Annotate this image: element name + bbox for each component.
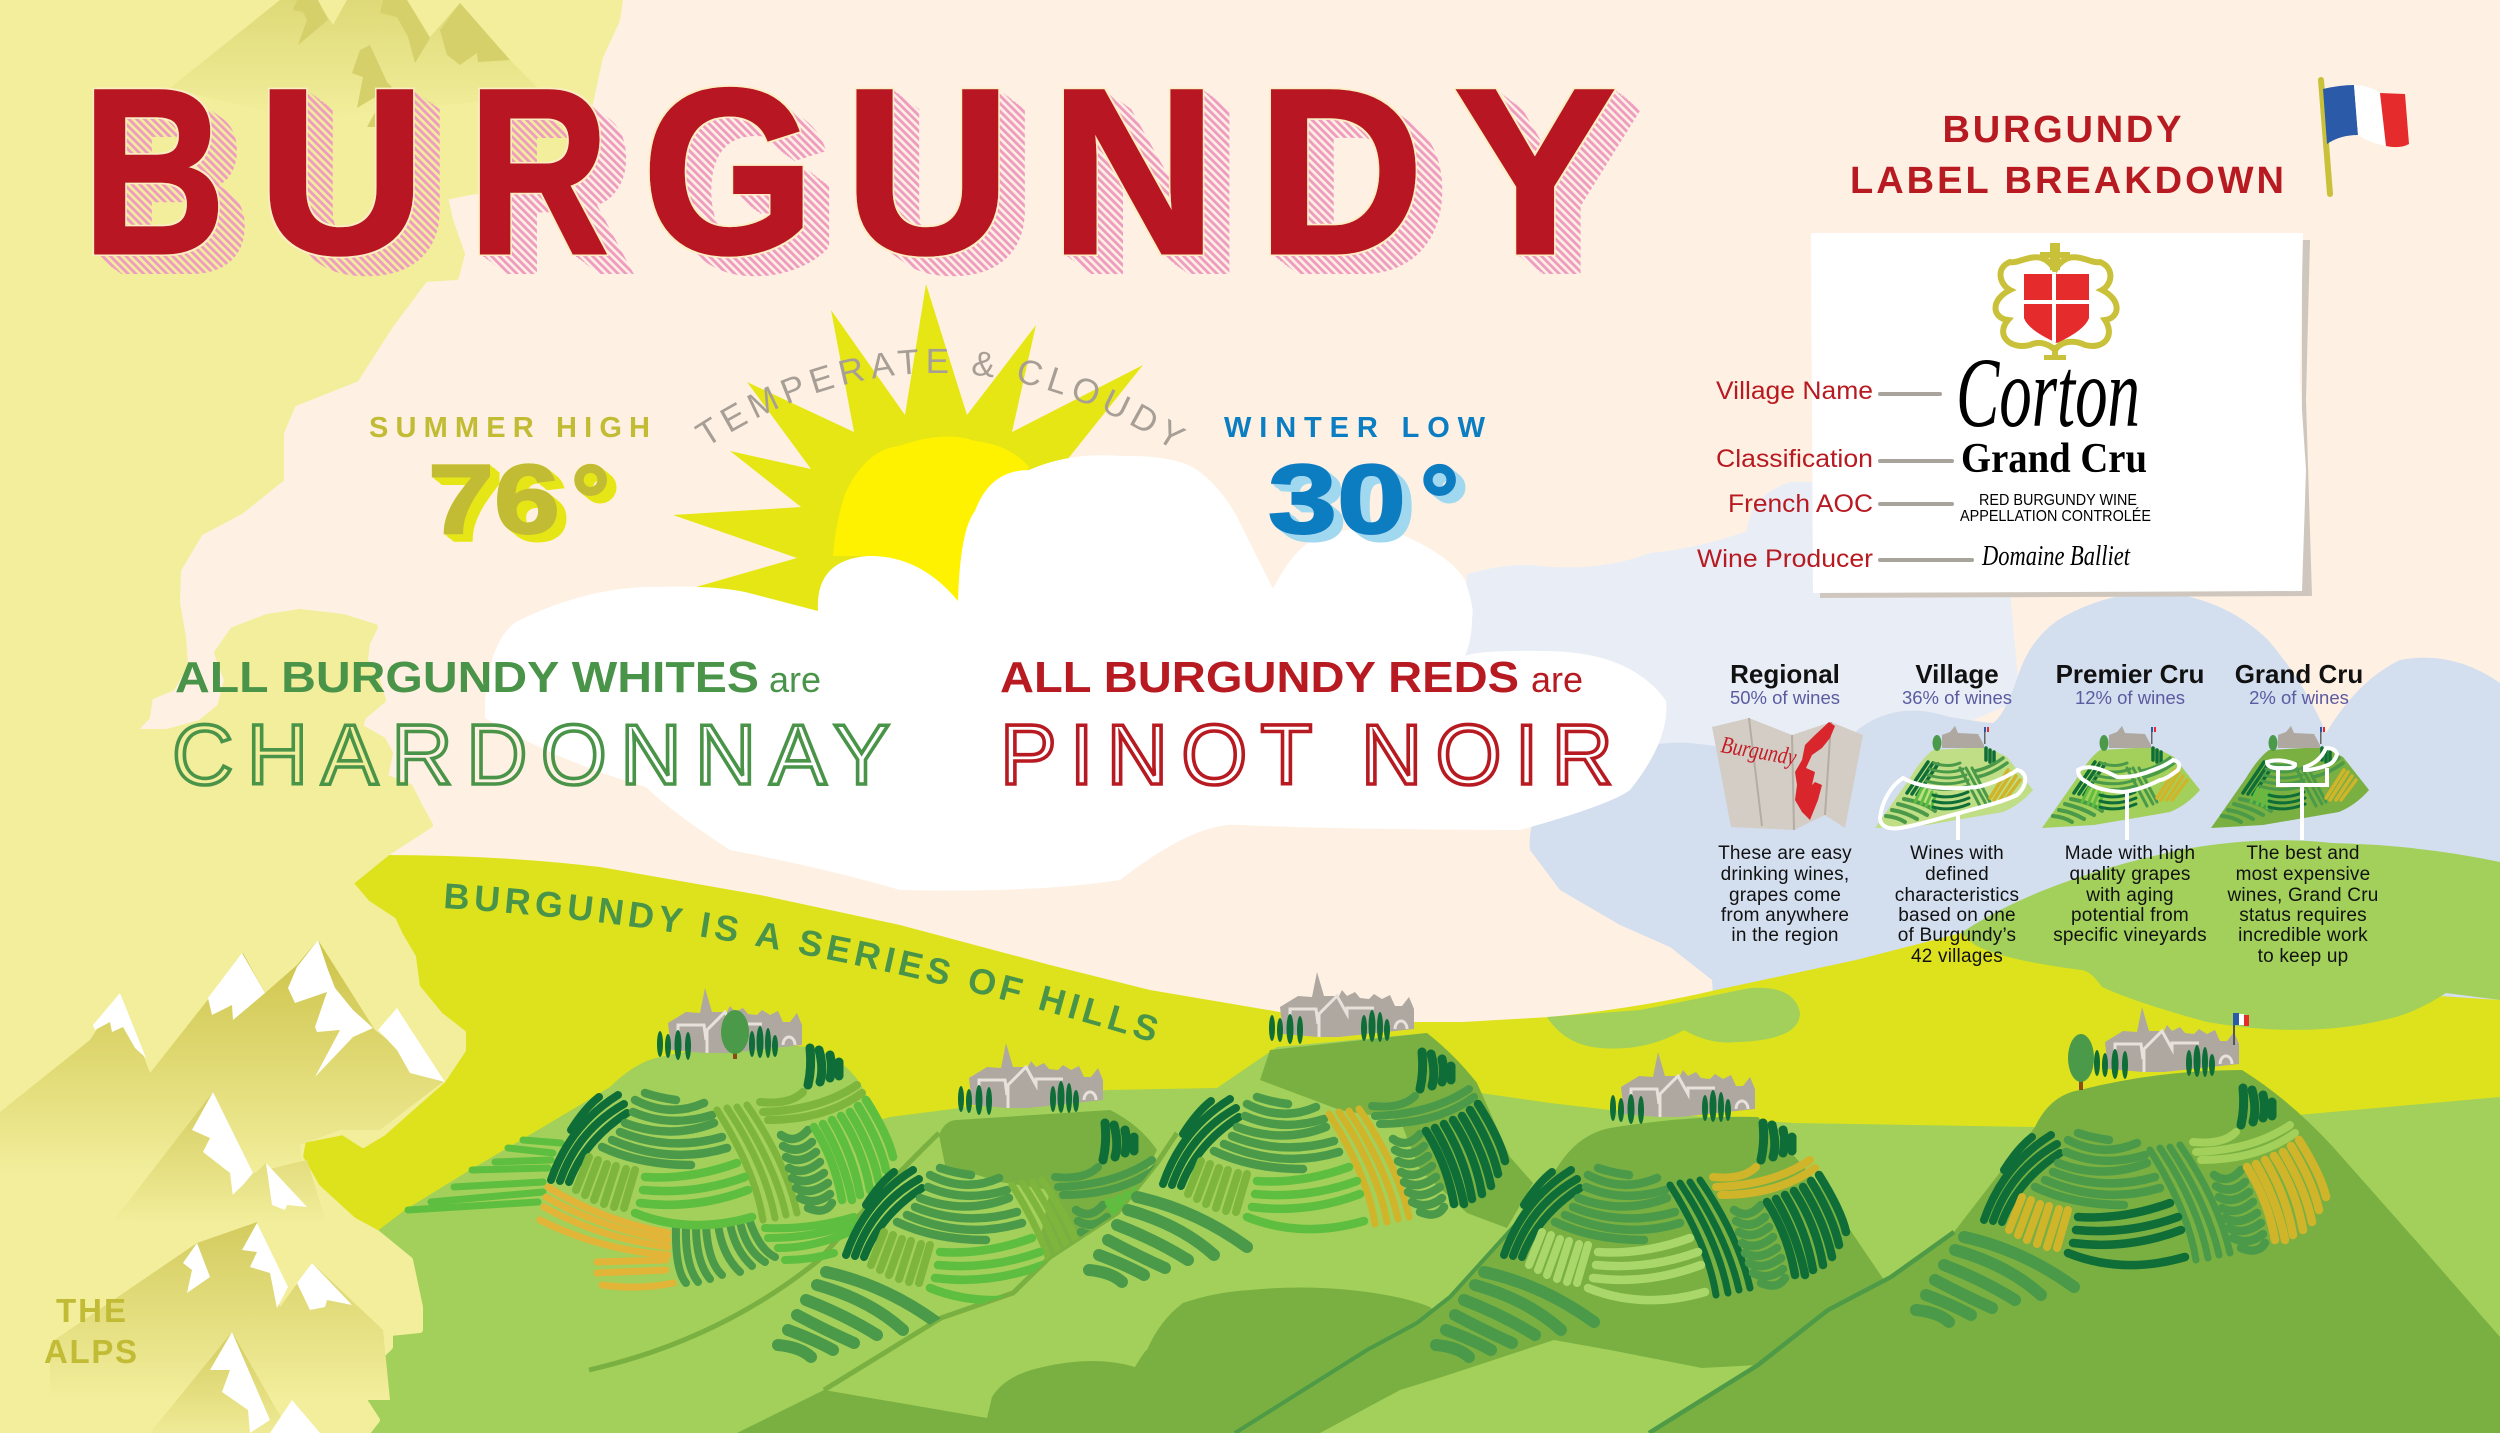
title: BURGUNDY	[92, 85, 1642, 276]
the alps label	[44, 1292, 137, 1370]
hill 5 tree	[2068, 1034, 2094, 1090]
label breakdown heading	[1850, 109, 2284, 202]
tier: regional	[1712, 659, 1863, 946]
appellation: APPELLATION CONTROLÉE	[1960, 506, 2151, 525]
darker blue clouds	[1530, 592, 2500, 1100]
winter low value	[1268, 444, 1459, 554]
top alps mountains	[170, 0, 545, 127]
summer high label: SUMMER HIGH	[369, 412, 650, 444]
red grape heading: are	[1531, 659, 1583, 700]
grand cru: Grand Cru	[1961, 436, 2147, 482]
tier: village: 42 villages	[1911, 946, 2003, 967]
tier: village: Village	[1915, 659, 1999, 689]
tier: grand cru: incredible work	[2238, 925, 2368, 946]
wine label card	[1811, 233, 2312, 598]
bottom peaks	[150, 1332, 290, 1433]
red grape heading: ALL BURGUNDY REDS	[1000, 653, 1519, 702]
white grape heading: ALL BURGUNDY WHITES	[175, 653, 759, 702]
hill 5 flag	[2233, 1013, 2249, 1045]
hill 2 vineyards	[778, 1043, 1188, 1357]
hill 4 body	[1235, 1117, 1891, 1433]
appellation: RED BURGUNDY WINE	[1979, 492, 2137, 509]
tier: regional: drinking wines,	[1721, 864, 1849, 885]
summer high value	[428, 444, 610, 554]
label callouts: French AOC	[1728, 490, 1873, 518]
winter low value: 30	[1268, 444, 1406, 554]
tier: village: Wines with	[1910, 843, 2004, 864]
tier: regional: from anywhere	[1721, 905, 1849, 926]
icon: map	[1712, 718, 1863, 830]
sun rays	[673, 284, 1143, 611]
light green blob right	[1961, 840, 2500, 1030]
hill 1 ochre patch	[540, 1187, 673, 1287]
title letters: N	[1050, 40, 1217, 304]
tier: village	[1875, 659, 2033, 967]
temperate and cloudy arc text: TEMPERATE & CLOUDY	[694, 348, 1186, 446]
tier: grand cru: to keep up	[2258, 946, 2348, 967]
tier: grand cru: The best and	[2246, 843, 2360, 864]
alps mountains	[0, 940, 445, 1433]
second peak	[114, 1092, 327, 1225]
hill 1 tree	[721, 1010, 749, 1059]
plain and hill 1	[300, 1033, 2500, 1433]
tier: grand cru: Grand Cru	[2235, 659, 2363, 689]
tier: village: of Burgundy’s	[1898, 925, 2016, 946]
icon: french flag	[2321, 80, 2409, 194]
winter low label: WINTER LOW	[1224, 412, 1486, 444]
label breakdown heading: BURGUNDY	[1942, 109, 2182, 151]
tier: premier cru: with aging	[2085, 885, 2174, 906]
icon: crest	[1996, 243, 2117, 360]
tier: regional: in the region	[1731, 925, 1839, 946]
hill 3 vineyards	[1089, 972, 1505, 1282]
chardonnay: CHARDONNAY	[172, 708, 890, 803]
series of hills curved text: BURGUNDY IS A SERIES OF HILLS	[445, 884, 1158, 1040]
tier: village: 36% of wines	[1902, 687, 2012, 708]
title letters: G	[642, 40, 815, 304]
corton: Corton	[1956, 337, 2140, 448]
tier: premier cru: quality grapes	[2069, 864, 2191, 885]
main ridge	[0, 940, 443, 1190]
tier: grand cru: most expensive	[2236, 864, 2370, 885]
title letters: B	[82, 40, 226, 304]
ridge lines	[589, 1133, 1177, 1390]
tier: premier cru	[2042, 659, 2207, 946]
title letters	[82, 40, 1616, 304]
cloud front over sun	[660, 455, 1273, 700]
the alps label: THE	[56, 1292, 126, 1329]
title letters: Y	[1454, 40, 1616, 304]
tier: regional: 50% of wines	[1730, 687, 1840, 708]
sun	[660, 284, 1273, 700]
tier: regional: grapes come	[1729, 885, 1841, 906]
small light green cloud	[1547, 988, 1800, 1049]
light blue clouds	[1460, 480, 2020, 880]
label callouts: Wine Producer	[1697, 545, 1873, 573]
label callouts: Village Name	[1716, 377, 1873, 405]
tier: regional: Regional	[1730, 659, 1840, 689]
title letters: R	[468, 40, 609, 304]
tier: grand cru	[2211, 659, 2379, 967]
hill 3 body	[1260, 1033, 1533, 1228]
tier: premier cru: 12% of wines	[2075, 687, 2185, 708]
icon: map: Burgundy	[1719, 732, 1799, 771]
hill 1 lower mid strips	[676, 1222, 775, 1283]
label callouts	[1697, 377, 1972, 573]
label callouts: Classification	[1716, 445, 1873, 473]
title striped shadow	[98, 90, 1642, 276]
title letters: U	[257, 40, 426, 304]
tier: village: based on one	[1898, 905, 2016, 926]
title letters: D	[1257, 40, 1424, 304]
hill 5 vineyards	[1916, 1007, 2326, 1322]
tier: village: characteristics	[1895, 885, 2019, 906]
hill 1 lower bright rows	[765, 1217, 854, 1260]
tier: grand cru: wines, Grand Cru	[2226, 885, 2379, 906]
label breakdown heading: LABEL BREAKDOWN	[1850, 160, 2284, 202]
summer high value: °	[571, 444, 610, 554]
hill 1 vineyards and town	[408, 988, 893, 1287]
hill 4 vineyards	[1436, 1052, 1846, 1357]
hill 5 body	[1649, 1070, 2500, 1433]
winter low value: °	[1420, 444, 1459, 554]
pale yellow alps land	[0, 0, 620, 1433]
tier: grand cru: 2% of wines	[2249, 687, 2349, 708]
pinot noir: PINOT NOIR	[1000, 708, 1613, 803]
title letters: U	[844, 40, 1011, 304]
foreground blob left	[737, 1288, 1460, 1433]
hill 1 bright left wing	[408, 1140, 561, 1210]
tier: premier cru: specific vineyards	[2053, 925, 2207, 946]
third peak	[203, 1163, 327, 1228]
white grape heading: are	[769, 659, 821, 700]
tier: regional: These are easy	[1718, 843, 1852, 864]
lower range	[50, 1222, 390, 1400]
white cloud	[485, 455, 1666, 891]
hill 2 top	[939, 1110, 1157, 1257]
lime hill	[290, 855, 2500, 1433]
tier: premier cru: Made with high	[2065, 843, 2195, 864]
domaine balliet: Domaine Balliet	[1981, 541, 2131, 572]
tier: premier cru: Premier Cru	[2056, 659, 2204, 689]
appellation	[1960, 492, 2151, 525]
tier: grand cru: status requires	[2239, 905, 2367, 926]
tier: village: defined	[1925, 864, 1989, 885]
sun disc	[833, 437, 1029, 601]
summer high value: 76	[428, 444, 560, 554]
snow caps	[93, 940, 445, 1082]
tier: premier cru: potential from	[2071, 905, 2189, 926]
the alps label: ALPS	[44, 1333, 137, 1370]
